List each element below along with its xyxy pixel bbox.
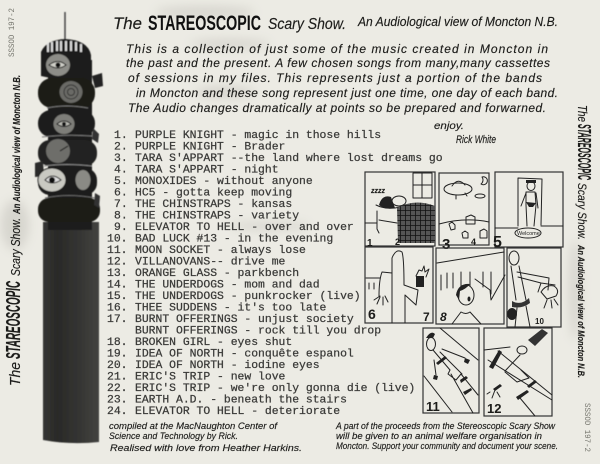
intro paragraph: This is a collection of just some of the music created in Moncton in <box>126 42 548 56</box>
comic panel 6-7: giant hand figure: 7 <box>423 310 430 324</box>
comic panel 5: figure in doorway: Welcome <box>517 231 540 237</box>
comic panel 3-4: UFO over houses: 3 <box>442 236 450 253</box>
track list: 14. <box>107 280 128 292</box>
comic panel 8: screaming face: 8 <box>440 310 447 324</box>
comic panel 12: drill at figure: 12 <box>487 401 501 416</box>
icon: tower eye 1 <box>46 54 70 76</box>
track list: TARA S'APPART --the land where lost dreams go <box>135 153 443 165</box>
left spine title: Scary Show. <box>8 218 23 276</box>
icon: tower side disc <box>76 170 90 190</box>
intro paragraph: the past and the present. A few chosen songs from many,many cassettes <box>126 56 550 70</box>
comic panel 3-4: UFO over houses <box>439 173 489 253</box>
track list: 6. <box>114 188 128 200</box>
track list: THE CHINSTRAPS - kansas <box>135 199 292 211</box>
icon: tower eye 3 <box>38 168 66 192</box>
track list: 2. <box>114 142 128 154</box>
track list: 4. <box>114 164 128 176</box>
comic panel 3-4: UFO over houses: 4 <box>471 237 476 247</box>
title: An Audiological view of Moncton N.B. <box>357 15 558 29</box>
track list: 7. <box>114 199 128 211</box>
left spine title: An Audiological view of Moncton N.B. <box>12 75 23 215</box>
charity note: Moncton. Support your community and document your scene. <box>336 441 558 451</box>
comic panel 9-10: figure with arm <box>507 248 561 327</box>
comic panel 11: figure strapped to table <box>423 328 479 414</box>
track list: 10. <box>107 234 128 246</box>
right spine title: STAREOSCOPIC <box>574 124 594 180</box>
comic panel 5: figure in doorway <box>493 172 563 251</box>
comic panel 6-7: giant hand figure <box>365 247 433 324</box>
comic panel 1-2: sleeping in bed <box>365 172 435 249</box>
track list: ORANGE GLASS - parkbench <box>135 268 299 280</box>
track list: PURPLE KNIGHT - magic in those hills <box>135 130 381 142</box>
comic panel 11: figure strapped to table: 11 <box>426 399 440 414</box>
charity note <box>335 421 558 451</box>
comic panel 8: screaming face <box>436 248 505 324</box>
title: Scary Show. <box>268 16 346 33</box>
credits note: compiled at the MacNaughton Center of <box>109 421 278 432</box>
track list: THEE SUDDENS - it's too late <box>135 302 327 314</box>
track list: 12. <box>107 256 128 268</box>
track list: BURNT OFFERINGS - rock till you drop <box>135 326 381 338</box>
track list: 21. <box>107 372 128 384</box>
track list: 5. <box>114 176 128 188</box>
intro paragraph: in Moncton and these song represent just one time, one day of each band. <box>136 86 558 100</box>
left spine title: STAREOSCOPIC <box>3 281 25 359</box>
comic panel 5: figure in doorway: 5 <box>493 234 502 251</box>
title: STAREOSCOPIC <box>148 12 261 35</box>
track list: MOON SOCKET - always lose <box>135 245 306 257</box>
track list: TARA S'APPART - night <box>135 164 279 176</box>
track list: EARTH A.D. - beneath the stairs <box>135 394 347 406</box>
tower illustration <box>35 12 103 443</box>
comic panel 12: drill at figure <box>484 328 552 416</box>
intro paragraph <box>126 42 558 115</box>
left spine title: The <box>7 362 24 386</box>
track list: 16. <box>107 302 128 314</box>
track list: THE UNDERDOGS - mom and dad <box>135 280 320 292</box>
right spine catalogue number: SSSOD 197-2 <box>582 403 591 452</box>
icon: tower eye 2 <box>54 114 74 134</box>
signature: Rick White <box>456 134 496 146</box>
track list: BAD LUCK #13 - in the evening <box>135 234 333 246</box>
intro paragraph: The Audio changes dramatically at points so be prepared and forwarned. <box>128 101 546 115</box>
icon: tower spiral disc <box>60 81 82 103</box>
track list: 18. <box>107 337 128 349</box>
comic panel 6-7: giant hand figure: 6 <box>368 306 376 322</box>
track list: 15. <box>107 291 128 303</box>
credits note <box>109 421 302 454</box>
track list: MONOXIDES - without anyone <box>135 176 313 188</box>
track list: IDEA OF NORTH - iodine eyes <box>135 360 320 372</box>
charity note: will be given to an animal welfare organisation in <box>336 431 542 441</box>
title <box>113 12 558 35</box>
track list: 8. <box>114 210 128 222</box>
title: The <box>113 14 142 33</box>
track list: 19. <box>107 348 128 360</box>
comic panel 9-10: figure with arm: 10 <box>535 317 544 326</box>
track list: 17. <box>107 314 128 326</box>
comic panel 1-2: sleeping in bed: zzzz <box>370 188 386 195</box>
track list: ERIC'S TRIP - we're only gonna die (live) <box>135 383 415 395</box>
track list: 3. <box>114 153 128 165</box>
track list: 23. <box>107 394 128 406</box>
intro paragraph: of sessions in my files. This represents just a portion of the bands <box>128 71 542 85</box>
signature: enjoy. <box>434 121 464 132</box>
track list: BROKEN GIRL - eyes shut <box>135 337 292 349</box>
track list: 1. <box>114 130 128 142</box>
track list: 11. <box>107 245 128 257</box>
right spine title: An Audiological view of Moncton N.B. <box>575 244 586 378</box>
right spine title: The <box>575 105 590 122</box>
comic panel 1-2: sleeping in bed: 1 <box>367 238 373 249</box>
credits note: Realised with love from Heather Harkins. <box>110 443 302 454</box>
track list: ELEVATOR TO HELL - over and over <box>135 222 354 234</box>
signature <box>434 121 496 146</box>
track list <box>107 130 443 418</box>
track list: IDEA OF NORTH - conquête espanol <box>135 348 354 360</box>
track list: 9. <box>114 222 128 234</box>
charity note: A part of the proceeds from the Stereoscopic Scary Show <box>335 421 555 431</box>
comic panel 1-2: sleeping in bed: 2 <box>395 237 400 247</box>
right spine title: Scary Show. <box>575 183 589 240</box>
track list: HC5 - gotta keep moving <box>135 188 292 200</box>
right spine title <box>574 105 594 378</box>
icon: tower dial <box>46 139 70 163</box>
track list: BURNT OFFERINGS - unjust society <box>135 314 354 326</box>
track list: ERIC'S TRIP - new love <box>135 372 286 384</box>
track list: ELEVATOR TO HELL - deteriorate <box>135 406 340 418</box>
left spine catalogue number: SSSOD 197-2 <box>8 8 17 57</box>
track list: 24. <box>107 406 128 418</box>
credits note: Science and Technology by Rick. <box>109 431 238 442</box>
track list: 22. <box>107 383 128 395</box>
track list: 20. <box>107 360 128 372</box>
track list: VILLANOVANS-- drive me <box>135 256 286 268</box>
track list: THE UNDERDOGS - punkrocker (live) <box>135 291 361 303</box>
left spine title <box>3 75 25 386</box>
track list: PURPLE KNIGHT - Brader <box>135 142 285 154</box>
track list: 13. <box>107 268 128 280</box>
track list: THE CHINSTRAPS - variety <box>135 210 299 222</box>
